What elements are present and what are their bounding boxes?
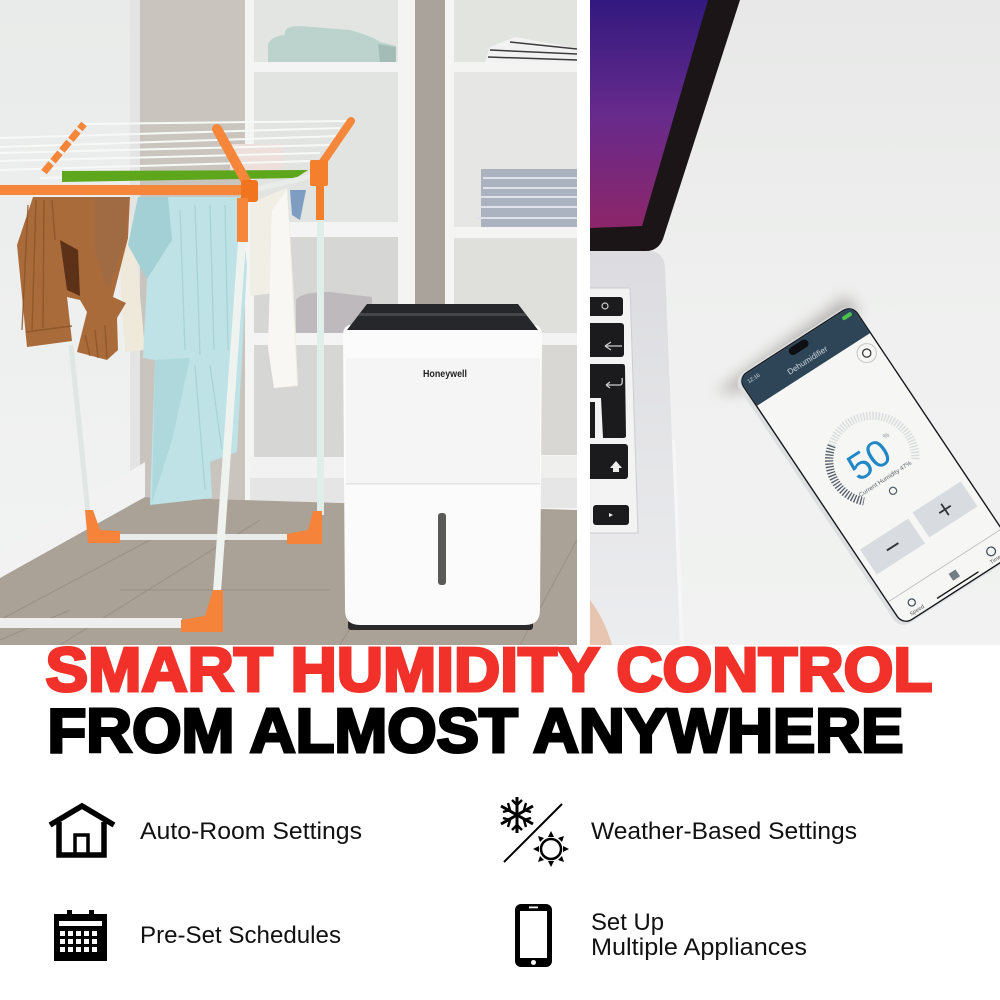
icon: smartphone xyxy=(515,904,552,967)
feature: weather-based settings: Weather-Based Settings xyxy=(591,818,857,845)
phone: % xyxy=(882,432,891,441)
feature: auto-room settings: Auto-Room Settings xyxy=(140,818,362,845)
icon: house xyxy=(50,806,114,855)
clothes: cream garment behind xyxy=(120,240,144,352)
drying rack front and orange frame xyxy=(0,121,351,632)
hand hint xyxy=(590,600,612,645)
fan icon xyxy=(888,486,898,495)
humidity dial xyxy=(825,412,920,506)
power button xyxy=(856,343,877,364)
dehumidifier xyxy=(343,304,542,630)
feature: set up multiple appliances xyxy=(591,909,807,961)
icon: calendar xyxy=(54,910,107,961)
status bar: 12:16 xyxy=(747,373,761,385)
drying rack back parts xyxy=(71,220,324,544)
floor xyxy=(0,497,577,645)
minus button xyxy=(860,518,925,575)
pale fabric behind rack xyxy=(230,144,284,172)
app header xyxy=(739,306,870,406)
feature: set up multiple appliances: Multiple Appliances xyxy=(591,934,807,961)
feature: set up multiple appliances: Set Up xyxy=(591,909,664,936)
icon: snowflake and sun xyxy=(501,797,569,867)
striped shirt on shelf xyxy=(485,37,577,62)
keyboard xyxy=(585,288,638,533)
notch xyxy=(788,340,808,355)
water tank window xyxy=(438,513,446,585)
title line 2: FROM ALMOST ANYWHERE xyxy=(48,697,904,766)
dehumidifier top vent xyxy=(347,304,538,330)
tab bar: Speed xyxy=(909,604,926,618)
phone xyxy=(733,303,1000,629)
title line 1: SMART HUMIDITY CONTROL xyxy=(46,636,932,705)
panel: laundry room photo xyxy=(0,0,577,645)
tab bar xyxy=(888,529,1000,624)
room background xyxy=(0,0,577,552)
front orange foot xyxy=(181,590,223,632)
phone screen xyxy=(739,306,1000,624)
clothes: teal towel xyxy=(128,197,247,505)
humidity value: 50 xyxy=(839,431,899,490)
feature: pre-set schedules: Pre-Set Schedules xyxy=(140,922,341,949)
green rack strip xyxy=(62,170,308,182)
folded towel on shelf xyxy=(268,26,396,62)
plus button xyxy=(912,481,978,538)
app title: Dehumidifier xyxy=(786,344,830,377)
panel: laptop and phone photo xyxy=(585,0,1000,645)
phone body xyxy=(733,303,1000,629)
phone shadow xyxy=(716,296,860,392)
drying rack wires xyxy=(0,121,347,178)
current humidity label: Current Humidity 47% xyxy=(858,460,913,499)
brand name: Honeywell xyxy=(423,368,467,380)
laptop screen xyxy=(590,0,740,251)
back orange feet xyxy=(85,510,120,543)
laptop base xyxy=(590,251,676,563)
stacked folders on shelf xyxy=(477,169,577,227)
folded grey cloth on lower shelf xyxy=(296,292,372,333)
clothes: brown sweater xyxy=(17,197,130,360)
clothes: cream and white garment xyxy=(250,188,306,388)
